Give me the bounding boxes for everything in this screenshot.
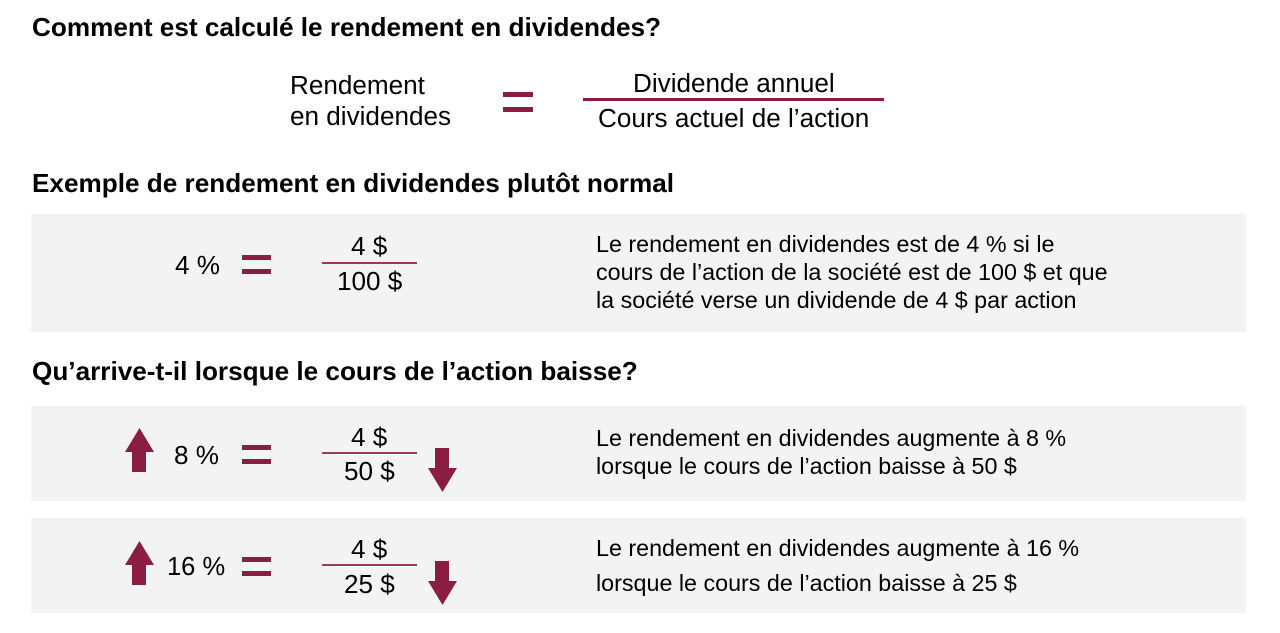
heading: example: Exemple de rendement en dividendes plutôt normal [32,168,674,198]
explanation [596,425,1066,479]
explanation: Le rendement en dividendes est de 4 % si le [596,231,1054,257]
fraction bar [583,98,884,101]
equals sign [242,255,271,274]
numerator: 4 $ [351,422,387,452]
explanation: Le rendement en dividendes augmente à 16 % [596,535,1079,561]
icon: down arrow [428,448,457,492]
icon: down arrow [428,561,457,605]
icon: up arrow [125,541,154,585]
equals sign [503,92,533,112]
fraction bar [322,262,417,264]
percentage: 16 % [167,553,225,581]
percentage: 4 % [175,250,220,280]
denominator: 50 $ [344,456,395,486]
denominator: 25 $ [344,569,395,599]
formula label: en dividendes [290,101,451,131]
percentage: 8 % [174,440,219,470]
explanation: Le rendement en dividendes augmente à 8 % [596,425,1066,451]
explanation [596,231,1108,313]
explanation: lorsque le cours de l’action baisse à 50 $ [596,453,1017,479]
explanation: cours de l’action de la société est de 100 $ et que [596,259,1108,285]
panel: example [31,214,1246,332]
explanation: la société verse un dividende de 4 $ par action [596,287,1076,313]
denominator: 100 $ [337,266,402,296]
denominator: Cours actuel de l’action [598,103,869,133]
icon: up arrow [125,428,154,472]
numerator: 4 $ [351,231,387,261]
title: Comment est calculé le rendement en dividendes? [32,12,661,42]
fraction bar [322,452,417,454]
equals sign [242,557,271,576]
fraction bar [322,564,417,566]
panel: 16 percent [31,518,1246,613]
explanation: lorsque le cours de l’action baisse à 25 $ [596,570,1017,596]
explanation [596,535,1079,596]
numerator: 4 $ [351,534,387,564]
formula label [290,70,451,131]
formula label: Rendement [290,70,425,100]
equals sign [242,445,271,464]
numerator: Dividende annuel [633,68,835,98]
heading: price drop: Qu’arrive-t-il lorsque le cours de l’action baisse? [32,356,638,386]
formula [290,68,884,133]
panel: 8 percent [31,406,1246,501]
